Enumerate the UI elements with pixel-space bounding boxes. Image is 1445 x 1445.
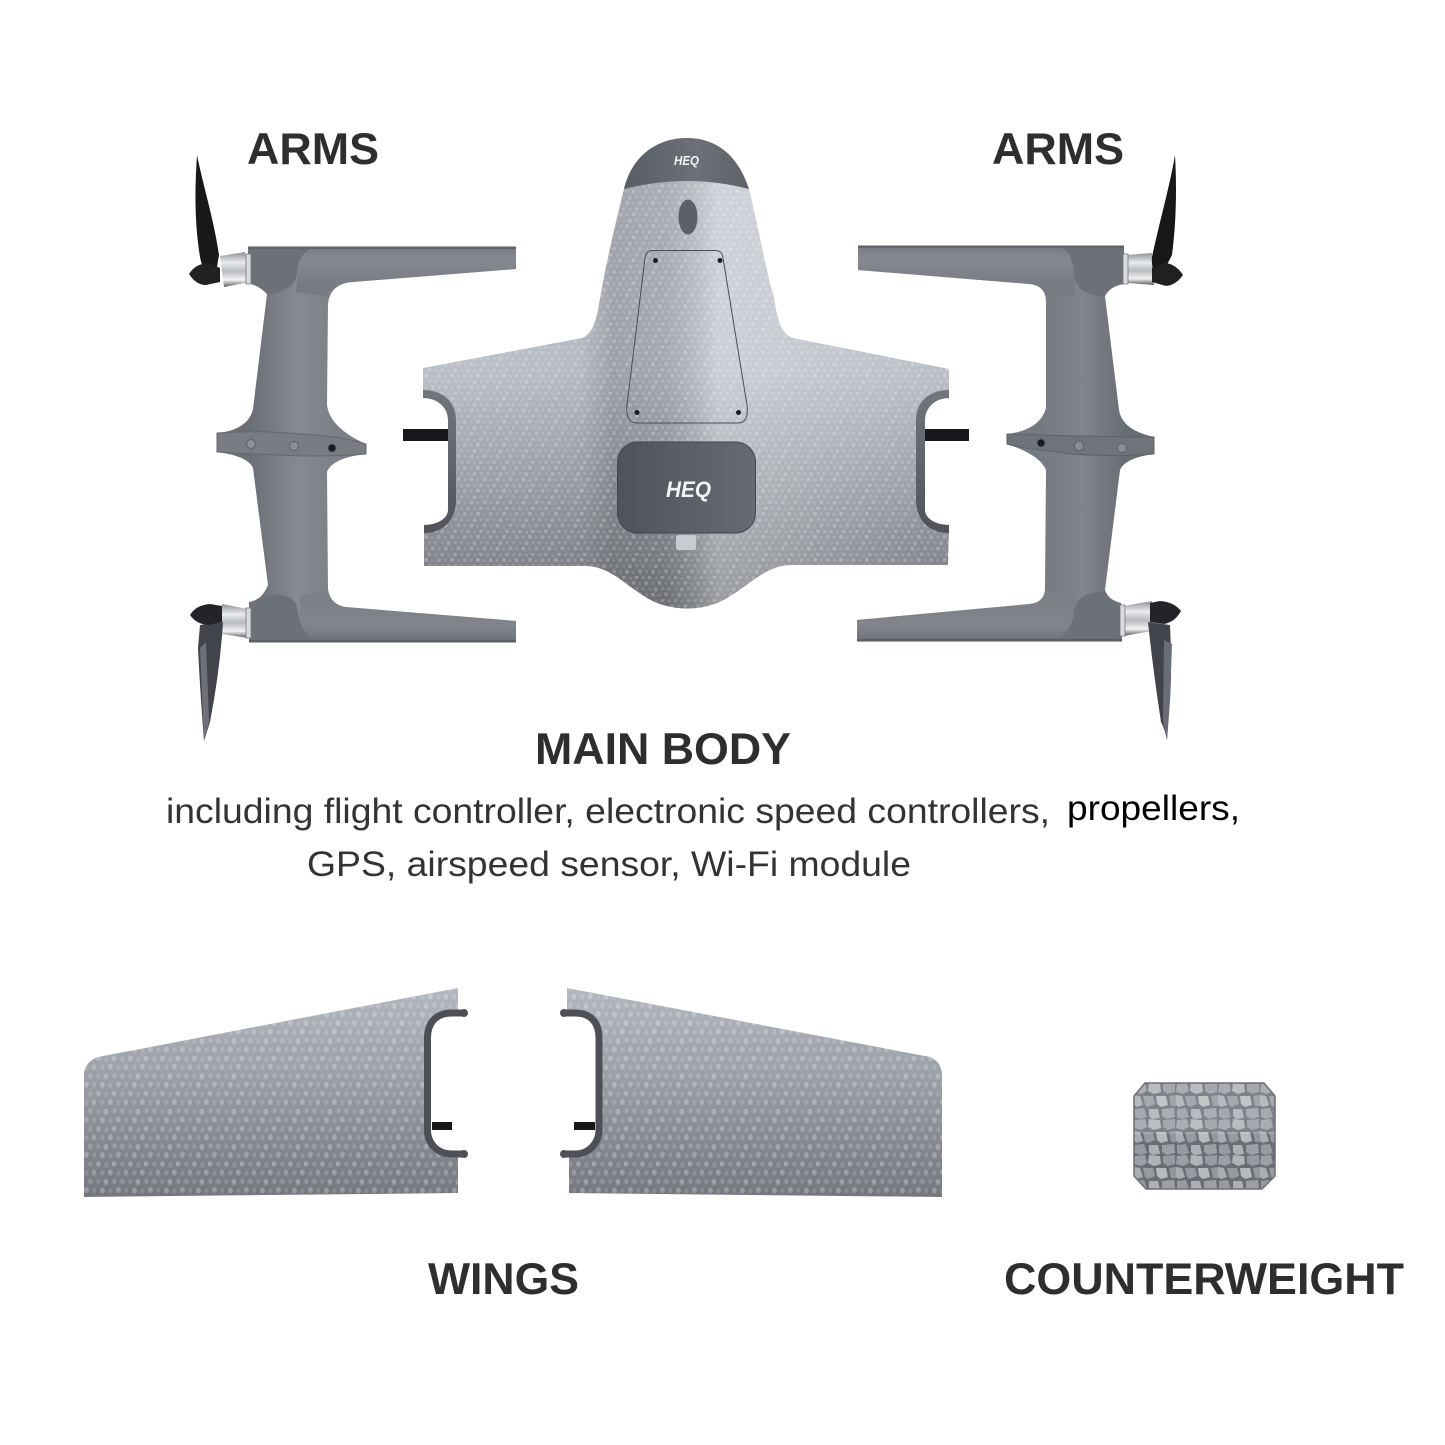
left arm frame: [217, 246, 516, 642]
bottom-left motor: [222, 604, 251, 638]
heading: left arms: ARMS: [247, 125, 379, 174]
right wing socket band: [916, 390, 949, 533]
sensor port: [678, 200, 698, 234]
left wing pin: [432, 1122, 452, 1130]
bottom-right motor: [1120, 601, 1152, 636]
right arm assembly: [857, 155, 1183, 740]
right wing: [560, 988, 942, 1197]
heading: counterweight: COUNTERWEIGHT: [1004, 1255, 1404, 1304]
main body: [403, 138, 969, 608]
nose logo: HEQ: [674, 153, 699, 168]
description text: [166, 788, 1240, 884]
top-left motor: [220, 252, 251, 287]
heading: right arms: ARMS: [992, 125, 1124, 174]
right wing panel: [567, 988, 942, 1197]
left wing socket band: [423, 390, 456, 533]
hatch panel with screws: [627, 250, 747, 423]
tail tab: [676, 535, 696, 550]
top-right motor: [1123, 253, 1154, 285]
top-left propeller: [189, 155, 220, 285]
heading: wings: WINGS: [428, 1255, 579, 1304]
description text: propellers,: [1067, 788, 1240, 828]
description text: GPS, airspeed sensor, Wi-Fi module: [307, 844, 911, 884]
left wing connector rail: [428, 1009, 468, 1158]
right wing connector rail: [560, 1009, 599, 1158]
right connector pin: [924, 429, 969, 441]
nose cap: [624, 138, 749, 189]
bottom-left propeller: [190, 604, 223, 741]
right wing pin: [574, 1122, 595, 1130]
description text: including flight controller, electronic speed controllers,: [166, 791, 1050, 831]
left wing panel: [84, 988, 458, 1197]
left wing: [84, 988, 468, 1197]
battery cover: [618, 442, 756, 533]
fuselage shell with foam texture: [423, 138, 949, 608]
counterweight block: [1134, 1083, 1275, 1189]
heading: main body: MAIN BODY: [535, 725, 791, 774]
top-right propeller: [1152, 155, 1183, 286]
left arm hub with screws: [217, 432, 366, 456]
right arm frame: [857, 246, 1154, 642]
left connector pin: [403, 429, 449, 441]
battery logo: HEQ: [666, 477, 711, 502]
bottom-right propeller: [1148, 601, 1181, 740]
left arm assembly: [189, 155, 516, 741]
right arm hub with screws: [1007, 434, 1154, 455]
